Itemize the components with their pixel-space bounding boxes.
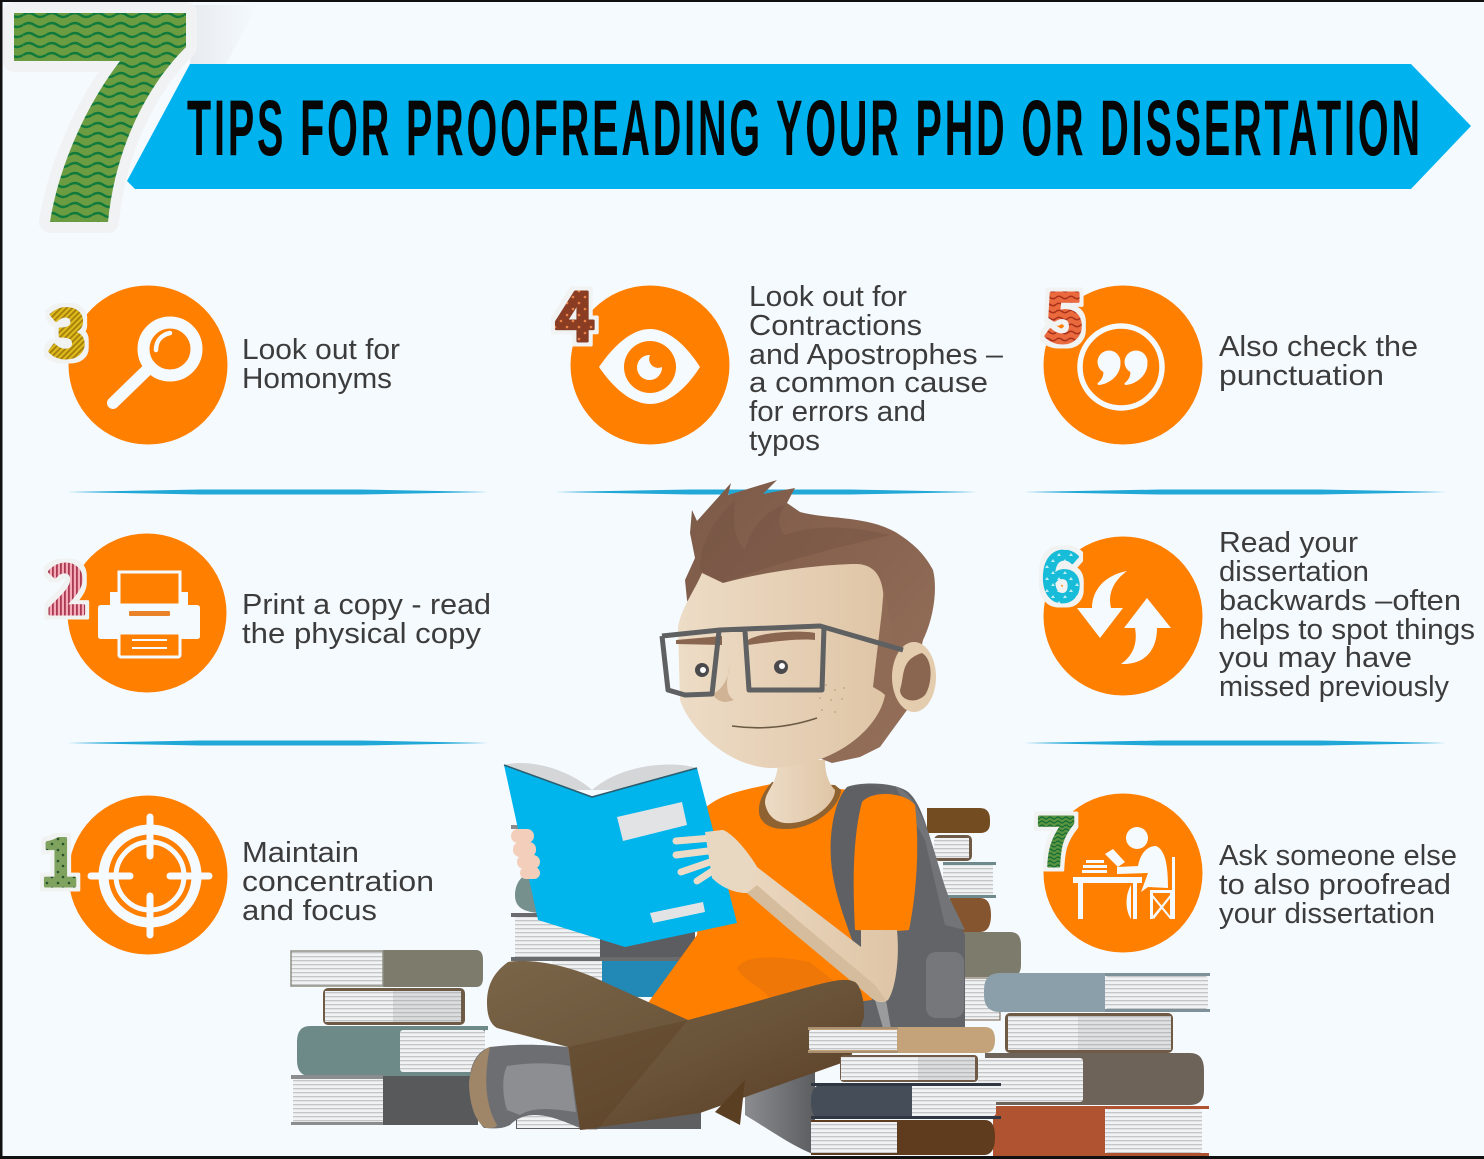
collar bbox=[759, 782, 841, 829]
tip 4 text: and Apostrophes – bbox=[749, 339, 1004, 371]
tip 2 text: the physical copy bbox=[242, 618, 482, 650]
tip 4 text: a common cause bbox=[749, 367, 988, 399]
divider row 2 right bbox=[1024, 740, 1446, 746]
sleeve bbox=[854, 794, 917, 931]
hair highlights bbox=[700, 500, 890, 583]
open book bbox=[504, 763, 737, 947]
tip 6 text bbox=[1219, 527, 1475, 703]
tip 7 text: your dissertation bbox=[1219, 898, 1435, 930]
tip 5 icon: quotation marks bbox=[1044, 263, 1202, 444]
backpack bbox=[847, 784, 965, 1035]
tip 4 icon: eye bbox=[555, 262, 730, 444]
book stack: front centre bbox=[808, 1027, 1001, 1155]
sideburn bbox=[873, 585, 894, 697]
tip 7 text: Ask someone else bbox=[1219, 840, 1457, 872]
book stack: centre back bbox=[511, 825, 701, 1129]
divider row 1 right bbox=[1024, 490, 1446, 494]
freckles bbox=[819, 684, 845, 713]
tip 4 text: for errors and bbox=[749, 396, 926, 428]
tip 5 text bbox=[1219, 331, 1418, 392]
tip 6 text: you may have bbox=[1219, 642, 1412, 674]
tip 6 icon: reverse arrows: 6 bbox=[1041, 522, 1081, 621]
tip 2 icon: printer: 2 bbox=[47, 535, 87, 634]
tip 4 text: typos bbox=[749, 425, 820, 457]
tip 3 icon: magnifier: 3 bbox=[48, 281, 87, 377]
tip 1 text bbox=[242, 837, 434, 927]
divider row 1 middle bbox=[555, 490, 977, 494]
nose bbox=[712, 665, 734, 702]
book stack: right back bbox=[927, 808, 1021, 1020]
legs and shoes bbox=[469, 961, 864, 1155]
tip 5 icon: quotation marks: 5 bbox=[1044, 263, 1084, 362]
tip 3 text: Homonyms bbox=[242, 363, 392, 395]
tip 6 text: backwards –often bbox=[1219, 585, 1461, 617]
palm bbox=[705, 830, 757, 893]
ear bbox=[892, 642, 936, 712]
tip 4 text: Look out for bbox=[749, 281, 907, 313]
eyebrows bbox=[676, 632, 815, 645]
tip 4 icon: eye: 4 bbox=[555, 262, 595, 361]
torso: orange t-shirt bbox=[648, 783, 872, 1022]
title banner bbox=[127, 64, 1471, 189]
shirt shading bbox=[737, 957, 845, 1008]
divider row 2 left bbox=[67, 740, 488, 746]
tip 7 text bbox=[1219, 840, 1457, 930]
tip 3 text bbox=[242, 334, 400, 395]
tip 2 text bbox=[242, 589, 491, 650]
tip 1 icon: target bbox=[40, 796, 228, 954]
tip 4 text bbox=[749, 281, 1004, 457]
tip 7 icon: person at desk: 7 bbox=[1036, 787, 1076, 886]
tip 5 text: Also check the bbox=[1219, 331, 1418, 363]
tip 3 text: Look out for bbox=[242, 334, 400, 366]
glasses bbox=[662, 626, 903, 695]
backpack strap bbox=[831, 785, 890, 955]
tip 6 text: helps to spot things bbox=[1219, 614, 1475, 646]
book stack: left bbox=[291, 950, 488, 1125]
tip 6 icon: reverse arrows bbox=[1041, 522, 1202, 696]
mouth bbox=[732, 718, 817, 728]
tip 1 text: Maintain bbox=[242, 837, 359, 869]
left hand bbox=[511, 829, 540, 879]
tip 6 text: dissertation bbox=[1219, 556, 1369, 588]
face bbox=[678, 564, 885, 768]
tip 1 text: and focus bbox=[242, 895, 377, 927]
title text: TIPS FOR PROOFREADING YOUR PHD OR DISSERTATION bbox=[187, 84, 1420, 173]
tip 2 icon: printer bbox=[47, 534, 226, 692]
tip 7 icon: person at desk bbox=[1036, 787, 1202, 952]
hand fingers over book bbox=[676, 838, 720, 881]
tip 2 text: Print a copy - read bbox=[242, 589, 491, 621]
tip 1 text: concentration bbox=[242, 866, 434, 898]
tip 7 text: to also proofread bbox=[1219, 869, 1451, 901]
tip 1 icon: target: 1 bbox=[40, 810, 79, 906]
tip 6 text: missed previously bbox=[1219, 671, 1449, 703]
eyes bbox=[695, 660, 788, 677]
book stack: right front bbox=[978, 973, 1210, 1157]
tip 5 text: punctuation bbox=[1219, 360, 1384, 392]
hair back bbox=[685, 480, 935, 763]
tip 3 icon: magnifier bbox=[48, 281, 228, 444]
arm bbox=[705, 830, 898, 1002]
student illustration bbox=[469, 480, 965, 1155]
tip 6 text: Read your bbox=[1219, 527, 1358, 559]
divider row 1 left bbox=[67, 490, 488, 494]
tip 4 text: Contractions bbox=[749, 310, 922, 342]
big number 7 bbox=[14, 5, 258, 222]
neck bbox=[765, 760, 835, 823]
